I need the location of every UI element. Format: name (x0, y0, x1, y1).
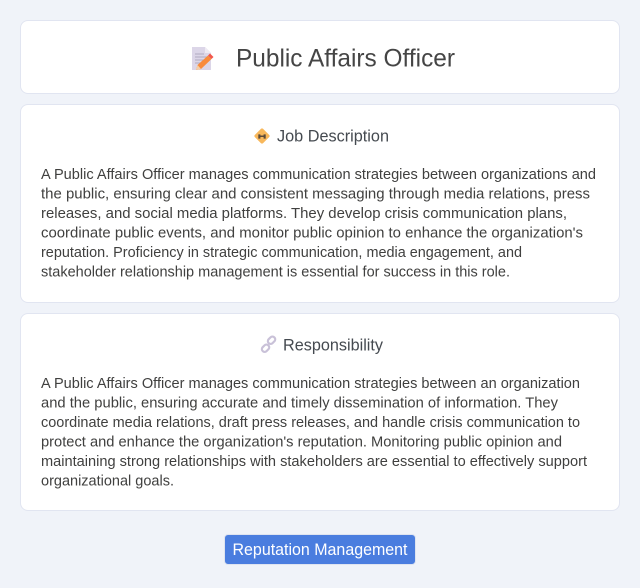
text block: job description body: releases, and social media platforms. They develop crisis communication plans, (41, 206, 567, 222)
panel: job description (20, 104, 620, 303)
text block: responsibility body (41, 376, 587, 490)
icon: diamond construction sign (254, 128, 270, 144)
text block: job description body (41, 167, 596, 280)
text block: job description body: stakeholder relationship management is essential for success in this role. (41, 264, 510, 280)
panel: title card (20, 20, 620, 94)
icon: chain link (260, 336, 276, 353)
text block: job description body: coordinate public events, and monitor public opinion to enhance the organization's (41, 226, 583, 242)
text block: responsibility body: maintaining strong relationships with stakeholders are essential to effectively support (41, 454, 587, 470)
text block: job description body: A Public Affairs Officer manages communication strategies between organizations and (41, 167, 596, 183)
text block: responsibility body: protect and enhance the organization's reputation. Monitoring public opinion and (41, 434, 562, 450)
panel: responsibility (20, 313, 620, 511)
button: reputation management (224, 534, 416, 565)
icon: document with pencil (192, 47, 214, 70)
title: Public Affairs Officer (236, 44, 455, 72)
heading: job description: Job Description (277, 128, 389, 146)
text block: responsibility body: coordinate media relations, draft press releases, and handle crisis communication to (41, 415, 580, 431)
text block: job description body: the public, ensuring clear and consistent messaging through media relations, press (41, 186, 590, 202)
text block: responsibility body: organizational goals. (41, 474, 174, 490)
text block: job description body: reputation. Proficiency in strategic communication, media engagement, and (41, 245, 522, 261)
heading: responsibility: Responsibility (283, 336, 384, 354)
text block: responsibility body: and the public, ensuring accurate and timely dissemination of information. They (41, 396, 559, 412)
text block: responsibility body: A Public Affairs Officer manages communication strategies between an organization (41, 376, 580, 392)
button: reputation management: Reputation Management (232, 541, 408, 559)
